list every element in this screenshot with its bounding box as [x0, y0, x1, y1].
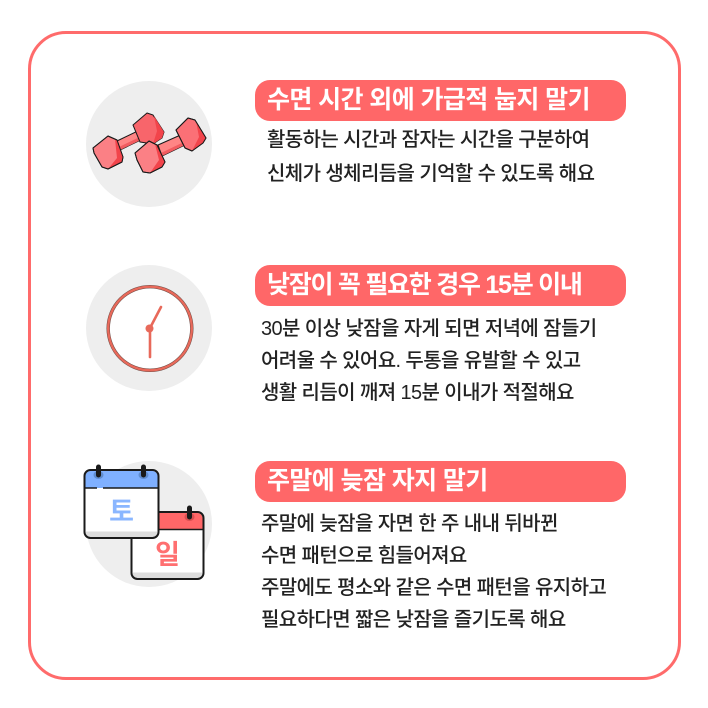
- text block: section 2: [261, 318, 597, 404]
- icon: weekend calendars: 토: [109, 497, 134, 527]
- text block: section 3: 주말에 늦잠을 자면 한 주 내내 뒤바뀐: [261, 513, 558, 535]
- heading: section 3: [255, 461, 626, 502]
- text block: section 3: 주말에도 평소와 같은 수면 패턴을 유지하고: [261, 577, 606, 599]
- icon: weekend calendars: 일: [155, 540, 180, 570]
- text block: section 2: 30분 이상 낮잠을 자게 되면 저녁에 잠들기: [261, 318, 597, 340]
- text block: section 1: 활동하는 시간과 잠자는 시간을 구분하여: [267, 129, 589, 151]
- text block: section 3: [261, 513, 606, 631]
- text block: section 3: 필요하다면 짧은 낮잠을 즐기도록 해요: [261, 609, 566, 631]
- icon: dumbbells: [86, 81, 212, 207]
- text block: section 3: 수면 패턴으로 힘들어져요: [261, 545, 467, 567]
- text block: section 2: 생활 리듬이 깨져 15분 이내가 적절해요: [261, 382, 574, 404]
- text block: section 2: 어려울 수 있어요. 두통을 유발할 수 있고: [261, 350, 580, 372]
- icon: weekend calendars: [84, 461, 212, 587]
- heading: section 2: [255, 265, 626, 306]
- heading: section 2: 낮잠이 꼭 필요한 경우 15분 이내: [267, 271, 582, 299]
- icon: clock: [86, 265, 212, 391]
- heading: section 1: [255, 80, 626, 121]
- heading: section 3: 주말에 늦잠 자지 말기: [267, 467, 488, 495]
- text block: section 1: [267, 129, 594, 185]
- heading: section 1: 수면 시간 외에 가급적 눕지 말기: [267, 86, 590, 114]
- text block: section 1: 신체가 생체리듬을 기억할 수 있도록 해요: [267, 163, 594, 185]
